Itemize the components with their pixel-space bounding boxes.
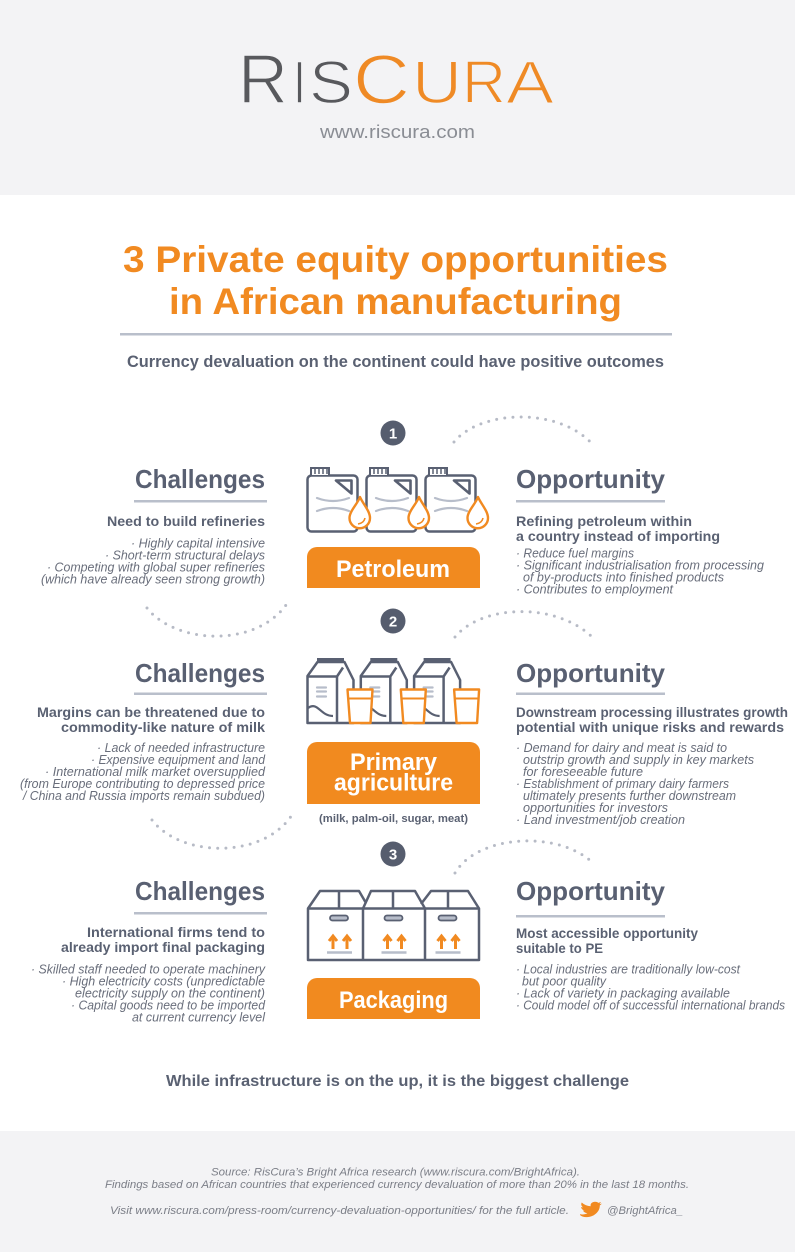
panel: packaging opportunity: Most accessible opportunity: [516, 925, 698, 941]
title: 3 Private equity opportunities: [123, 239, 668, 280]
panel: agriculture opportunity: opportunities for investors: [523, 801, 668, 815]
panel: packaging opportunity: Opportunity: [516, 876, 666, 906]
panel: packaging challenges: already import final packaging: [61, 939, 265, 955]
panel: packaging opportunity: [516, 876, 785, 1012]
logo: RisCura: R: [238, 40, 288, 118]
twitter handle: @BrightAfrica_: [607, 1205, 683, 1217]
panel: packaging challenges: · Skilled staff needed to operate machinery: [31, 962, 266, 976]
panel: packaging challenges: · Capital goods need to be imported: [71, 998, 266, 1012]
label: petroleum: [307, 547, 480, 588]
panel: petroleum challenges: · Competing with global super refineries: [47, 560, 265, 574]
caption: agriculture examples: (milk, palm-oil, sugar, meat): [319, 813, 468, 825]
panel: packaging opportunity: · Could model off of successful international brands: [516, 998, 785, 1012]
logo: RisCura: [238, 40, 554, 118]
number badge 2: 2: [389, 614, 397, 630]
logo: RisCura: A: [506, 49, 554, 116]
panel: petroleum opportunity: Refining petroleum within: [516, 513, 692, 529]
panel: agriculture challenges: commodity-like nature of milk: [61, 719, 265, 735]
panel: packaging challenges: electricity supply on the continent): [75, 986, 265, 1000]
icon: cardboard boxes: [308, 891, 479, 960]
panel: petroleum opportunity: · Reduce fuel margins: [516, 546, 634, 560]
number badge 3: [380, 842, 406, 866]
panel: petroleum opportunity: of by-products into finished products: [523, 570, 724, 584]
panel: agriculture challenges: · Lack of needed infrastructure: [97, 741, 265, 755]
logo: RisCura: S: [309, 49, 353, 116]
title: [123, 239, 668, 322]
panel: petroleum opportunity: a country instead of importing: [516, 528, 720, 544]
dotted arcs: [147, 417, 596, 873]
website url: www.riscura.com: [319, 122, 475, 142]
panel: petroleum challenges: · Highly capital intensive: [131, 536, 265, 550]
logo: RisCura: R: [462, 49, 506, 116]
icon: milk cartons and glasses: [308, 660, 479, 723]
panel: agriculture opportunity: Opportunity: [516, 658, 666, 688]
panel: agriculture challenges: · International milk market oversupplied: [45, 765, 266, 779]
source note: Findings based on African countries that experienced currency devaluation of more than 20% in the last 18 months.: [105, 1179, 689, 1191]
footer band: [0, 1131, 795, 1252]
panel: agriculture challenges: Challenges: [135, 658, 265, 688]
panel: petroleum challenges: [41, 464, 267, 586]
panel: agriculture challenges: [20, 658, 267, 803]
panel: packaging challenges: [31, 876, 267, 1024]
label: primary agriculture: agriculture: [334, 770, 453, 796]
panel: petroleum challenges: · Short-term structural delays: [105, 548, 265, 562]
panel: petroleum opportunity: Opportunity: [516, 464, 666, 494]
panel: petroleum challenges: Challenges: [135, 464, 265, 494]
label: packaging: Packaging: [339, 987, 448, 1014]
source note: [105, 1166, 689, 1191]
panel: agriculture opportunity: Downstream processing illustrates growth: [516, 704, 788, 720]
panel: petroleum opportunity: [516, 464, 764, 596]
icon: jerrycans with oil drops: [308, 468, 488, 532]
panel: petroleum challenges: (which have already seen strong growth): [41, 572, 265, 586]
number badge 3: 3: [389, 846, 397, 864]
panel: packaging opportunity: suitable to PE: [516, 940, 603, 956]
panel: petroleum challenges: Need to build refineries: [107, 513, 265, 529]
panel: packaging challenges: International firms tend to: [87, 924, 265, 940]
logo: RisCura: C: [353, 40, 410, 118]
panel: packaging opportunity: but poor quality: [522, 974, 607, 988]
panel: agriculture opportunity: for foreseeable future: [523, 765, 643, 779]
panel: agriculture challenges: Margins can be threatened due to: [37, 704, 265, 720]
logo: RisCura: U: [412, 49, 462, 116]
number badge 2: [380, 608, 406, 634]
number badge 1: [380, 420, 406, 446]
icon: twitter bird: [580, 1202, 602, 1217]
panel: agriculture opportunity: · Land investment/job creation: [516, 813, 685, 827]
panel: agriculture challenges: · Expensive equipment and land: [91, 753, 266, 767]
panel: petroleum opportunity: · Contributes to employment: [516, 582, 674, 596]
panel: agriculture opportunity: · Demand for dairy and meat is said to: [516, 741, 727, 755]
label: primary agriculture: Primary: [350, 749, 438, 776]
logo: RisCura: I: [293, 49, 306, 116]
header band: [0, 0, 795, 195]
panel: agriculture challenges: / China and Russia imports remain subdued): [22, 789, 265, 803]
panel: agriculture opportunity: potential with unique risks and rewards: [516, 719, 784, 735]
panel: packaging opportunity: · Lack of variety in packaging available: [516, 986, 730, 1000]
label: packaging: [307, 978, 480, 1019]
panel: packaging challenges: Challenges: [135, 876, 265, 906]
source note: Source: RisCura’s Bright Africa research (www.riscura.com/BrightAfrica).: [211, 1166, 580, 1178]
article link: Visit www.riscura.com/press-room/currency-devaluation-opportunities/ for the full article.: [110, 1205, 569, 1217]
panel: packaging opportunity: · Local industries are traditionally low-cost: [516, 962, 741, 976]
label: primary agriculture: [307, 742, 480, 804]
number badge 1: 1: [389, 426, 397, 442]
panel: agriculture opportunity: ultimately presents further downstream: [523, 789, 736, 803]
panel: agriculture opportunity: outstrip growth and supply in key markets: [523, 753, 754, 767]
panel: agriculture opportunity: · Establishment of primary dairy farmers: [516, 777, 729, 791]
panel: packaging challenges: · High electricity costs (unpredictable: [62, 974, 265, 988]
panel: packaging challenges: at current currency level: [132, 1010, 266, 1024]
panel: petroleum opportunity: · Significant industrialisation from processing: [516, 558, 764, 572]
panel: agriculture opportunity: [516, 658, 788, 827]
title: in African manufacturing: [169, 281, 622, 322]
subtitle: Currency devaluation on the continent could have positive outcomes: [127, 353, 664, 371]
label: petroleum: Petroleum: [336, 556, 450, 583]
panel: agriculture challenges: (from Europe contributing to depressed price: [20, 777, 265, 791]
closing statement: While infrastructure is on the up, it is the biggest challenge: [166, 1073, 629, 1090]
